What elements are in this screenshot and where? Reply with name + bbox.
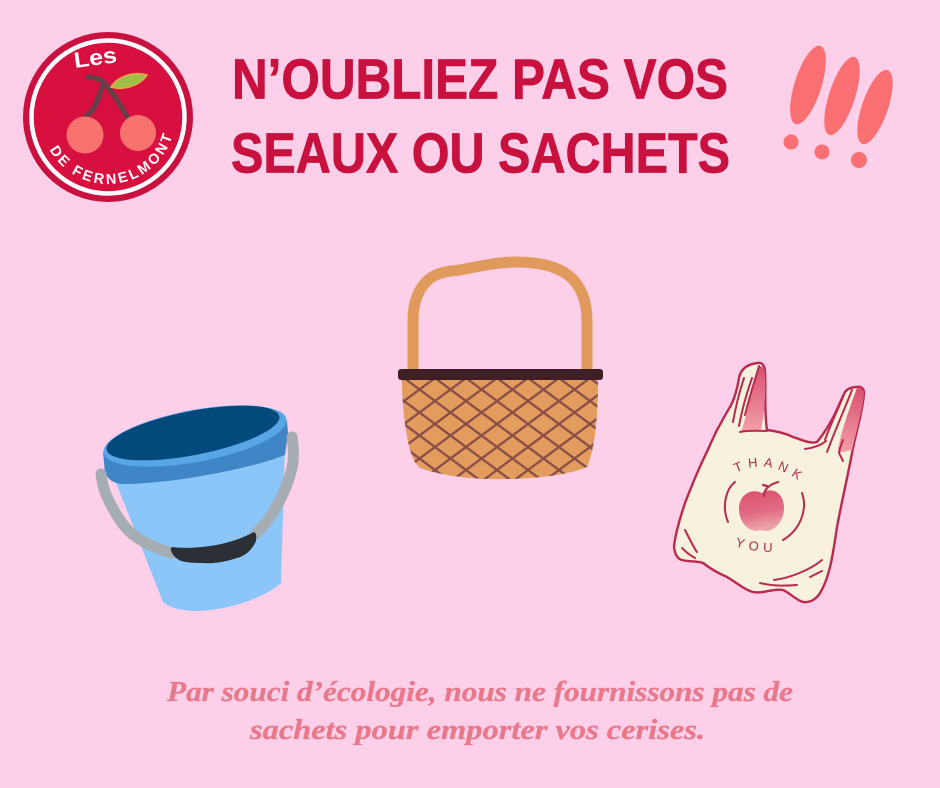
bag text: THANK [732,458,802,480]
caption [166,677,793,746]
bucket handle [101,437,293,553]
logo text: Les: Les [72,42,118,73]
logo icon: cherries [66,74,156,154]
title [231,48,730,186]
icon: bucket [99,393,293,611]
logo: les cerises de Fernelmont [23,32,193,202]
bag handle interiors [741,366,765,432]
bag apple [739,490,784,531]
bag text [732,458,802,552]
icon: plastic bag [672,362,866,604]
bag text: YOU [738,538,772,552]
caption: sachets pour emporter vos cerises. [249,715,705,746]
bag crease lines [682,366,852,586]
icon: basket [398,262,603,479]
caption: Par souci d’écologie, nous ne fournissons pas de [166,677,793,708]
title: SEAUX OU SACHETS [231,122,730,186]
title: N’OUBLIEZ PAS VOS [232,48,728,112]
icon: exclamation marks [783,42,900,168]
logo text: de Fernelmont: DE FERNELMONT [50,132,172,184]
